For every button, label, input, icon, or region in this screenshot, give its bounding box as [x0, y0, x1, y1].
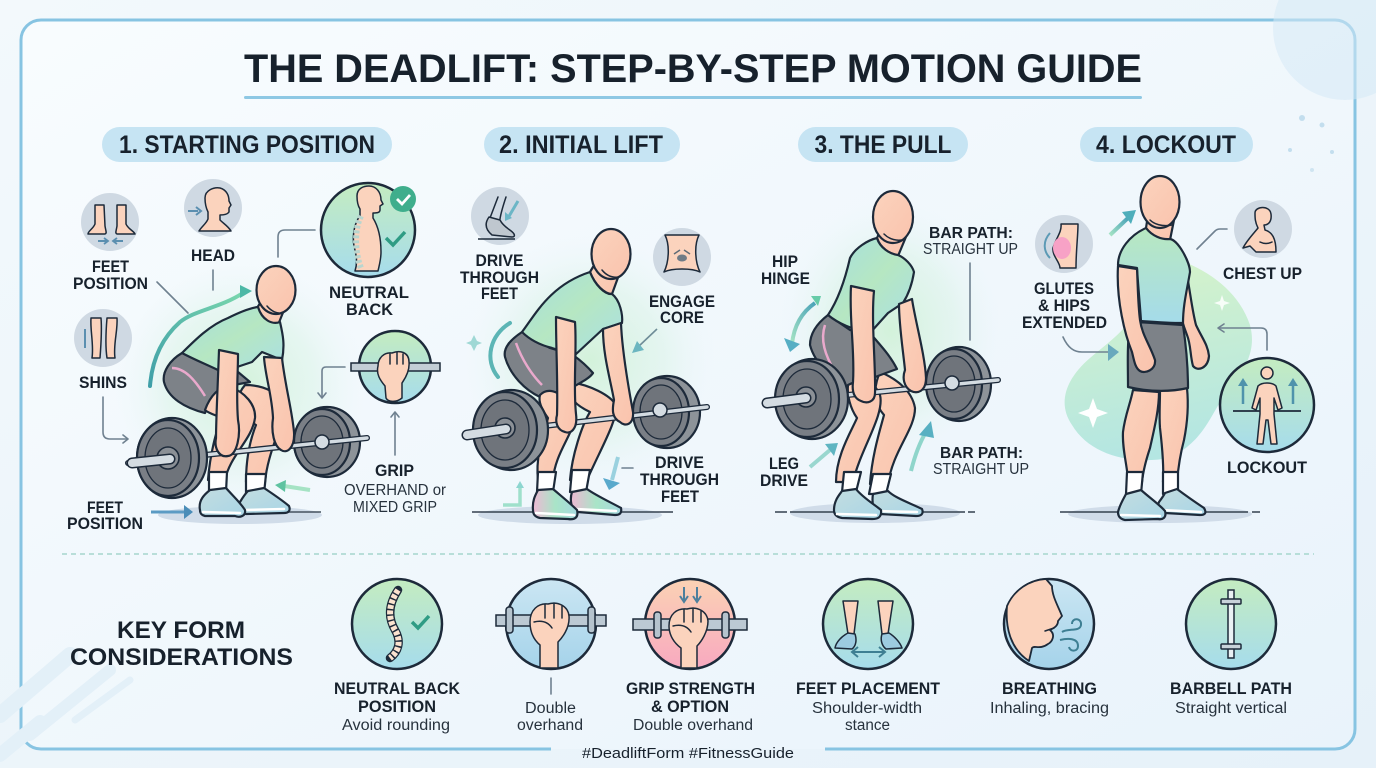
- label: glutes & hips extended: GLUTES: [1034, 280, 1094, 298]
- connector: lockout: [1218, 324, 1267, 350]
- label: grip: OVERHAND or: [344, 482, 446, 499]
- text: [517, 700, 583, 734]
- arrow: upward: [1110, 210, 1136, 235]
- heading: step 4 pill: 4. LOCKOUT: [1096, 131, 1236, 159]
- icon: grip: [351, 331, 440, 403]
- panel: barbell path: [1170, 579, 1292, 717]
- text: BARBELL PATH: [1170, 680, 1292, 698]
- text: GRIP STRENGTH: [626, 680, 755, 698]
- label: bar path lower: STRAIGHT UP: [933, 461, 1029, 478]
- label: engage core: [649, 293, 715, 327]
- label: hip hinge: HINGE: [761, 270, 810, 288]
- label: drive through feet lower: DRIVE: [655, 454, 704, 472]
- panel: feet placement: [796, 579, 940, 734]
- label: glutes & hips extended: & HIPS: [1038, 297, 1090, 315]
- arrow: engage core: [632, 329, 657, 353]
- figure 2: lifter in initial lift: [467, 229, 707, 524]
- text: Inhaling, bracing: [990, 700, 1109, 717]
- arrow: feet position: [151, 505, 193, 519]
- text: [334, 680, 460, 734]
- connector: head: [212, 270, 214, 290]
- text: Double: [525, 700, 576, 717]
- label: bar path lower: [933, 445, 1029, 478]
- arrow: hip arc: [490, 323, 510, 377]
- label: drive through feet upper: DRIVE: [476, 252, 524, 270]
- icon: neutral back: [321, 183, 416, 277]
- arrow: heels: [275, 480, 310, 492]
- label: feet position: FEET: [92, 258, 129, 276]
- label: drive through feet upper: [460, 252, 539, 303]
- panel: breathing: [990, 579, 1109, 717]
- connector: bar path: [969, 263, 971, 340]
- text: BREATHING: [1002, 680, 1097, 698]
- label: hip hinge: HIP: [772, 253, 798, 271]
- icon: lockout: [1220, 358, 1314, 452]
- label: drive through feet lower: THROUGH: [640, 471, 719, 489]
- icon: sparkle: [466, 335, 482, 351]
- text: [1170, 680, 1292, 717]
- arrow: hip hinge: [784, 296, 821, 352]
- heading: key form considerations: [70, 617, 293, 671]
- text: stance: [845, 717, 890, 734]
- arrow: bar path lower: [911, 421, 934, 471]
- label: hip hinge: [761, 253, 810, 288]
- icon: foot drive: [471, 187, 529, 245]
- text: [990, 680, 1109, 717]
- panel: step 3 the pull: [760, 191, 1029, 523]
- heading: key form considerations: CONSIDERATIONS: [70, 644, 293, 671]
- connector: chest up: [1197, 229, 1227, 249]
- label: neutral back: NEUTRAL: [329, 283, 409, 302]
- heading: key form considerations: KEY FORM: [117, 617, 245, 644]
- label: feet position lower: FEET: [87, 499, 123, 517]
- title: THE DEADLIFT: STEP-BY-STEP MOTION GUIDE: [244, 47, 1142, 91]
- arrow: leg drive: [810, 443, 838, 467]
- text: overhand: [517, 717, 583, 734]
- figure 4: lifter at lockout: [1060, 176, 1260, 523]
- icon: grip: [496, 579, 606, 669]
- heading: step 2 pill: 2. INITIAL LIFT: [499, 131, 663, 159]
- label: feet position: POSITION: [73, 275, 148, 293]
- figure 3: lifter during pull: [767, 191, 998, 523]
- label: bar path lower: BAR PATH:: [940, 445, 1023, 462]
- label: leg drive: LEG: [769, 455, 799, 473]
- label: shins: SHINS: [79, 374, 127, 392]
- label: engage core: CORE: [660, 309, 704, 327]
- connector: neutral back: [278, 230, 315, 257]
- icon: chest up: [1234, 200, 1292, 258]
- arrow: drive down: [603, 457, 633, 490]
- panel: step 4 lockout: [1022, 176, 1314, 523]
- label: chest up: CHEST UP: [1223, 265, 1302, 283]
- shape: background blob: [1065, 263, 1252, 460]
- label: grip: GRIP: [375, 462, 414, 480]
- icon: feet position: [81, 193, 139, 251]
- label: feet position: [73, 258, 148, 293]
- icon: shins: [74, 309, 132, 367]
- panel: step 2 initial lift: [460, 187, 719, 524]
- label: drive through feet lower: [640, 454, 719, 506]
- panel: neutral back position: [334, 579, 460, 734]
- panel: step 1 starting position: [67, 179, 446, 533]
- heading: step 1 pill: 1. STARTING POSITION: [119, 131, 375, 159]
- separator tick: [550, 678, 552, 694]
- panel: grip strength & option: [626, 579, 755, 734]
- text: [626, 680, 755, 734]
- icon: core: [653, 228, 711, 286]
- label: head: HEAD: [191, 247, 235, 265]
- text: Shoulder-width: [812, 700, 922, 717]
- text: Avoid rounding: [342, 717, 450, 734]
- label: glutes & hips extended: EXTENDED: [1022, 314, 1107, 332]
- label: bar path upper: BAR PATH:: [929, 225, 1013, 242]
- text: Double overhand: [633, 717, 753, 734]
- label: engage core: ENGAGE: [649, 293, 715, 311]
- arrow: back line: [150, 285, 252, 386]
- arrow: floor corner: [503, 481, 524, 505]
- panel: double overhand: [496, 579, 606, 734]
- icon: head: [184, 179, 242, 237]
- label: neutral back: [329, 283, 409, 319]
- label: drive through feet lower: FEET: [661, 488, 699, 506]
- icon: sparkles: [1078, 295, 1230, 428]
- text: [796, 680, 940, 734]
- label: drive through feet upper: FEET: [481, 285, 518, 303]
- label: bar path upper: STRAIGHT UP: [923, 241, 1018, 258]
- icon: fist on bar: [633, 579, 747, 669]
- label: feet position lower: [67, 499, 143, 533]
- decoration: bottom-left streaks: [0, 655, 130, 755]
- icon: glutes: [1035, 215, 1093, 273]
- label: lockout: LOCKOUT: [1227, 459, 1307, 477]
- label: feet position lower: POSITION: [67, 515, 143, 533]
- label: grip: MIXED GRIP: [353, 499, 437, 516]
- icon: vertical bar: [1186, 579, 1276, 669]
- label: glutes & hips extended: [1022, 280, 1107, 332]
- label: bar path upper: [923, 225, 1018, 258]
- text: Straight vertical: [1175, 700, 1287, 717]
- text: POSITION: [358, 698, 436, 716]
- connectors: grip: [318, 367, 399, 455]
- label: grip: [344, 462, 446, 516]
- icon: feet: [823, 579, 913, 669]
- icon: face breathing: [1004, 579, 1094, 669]
- connector: feet position: [157, 282, 188, 313]
- title underline: [244, 96, 1142, 99]
- text: & OPTION: [651, 698, 729, 716]
- label: neutral back: BACK: [346, 300, 394, 319]
- heading: step 3 pill: 3. THE PULL: [814, 131, 952, 159]
- arrow: glutes: [1063, 337, 1119, 361]
- decoration: top-right corner shapes: [1273, 0, 1376, 172]
- connector: shins: [103, 397, 128, 443]
- label: leg drive: DRIVE: [760, 472, 808, 490]
- hashtags: #DeadliftForm #FitnessGuide: [582, 746, 794, 762]
- label: drive through feet upper: THROUGH: [460, 269, 539, 287]
- text: NEUTRAL BACK: [334, 680, 460, 698]
- figure 1: lifter in starting position: [128, 266, 367, 524]
- text: FEET PLACEMENT: [796, 680, 940, 698]
- icon: spine check: [352, 579, 442, 669]
- label: leg drive: [760, 455, 808, 490]
